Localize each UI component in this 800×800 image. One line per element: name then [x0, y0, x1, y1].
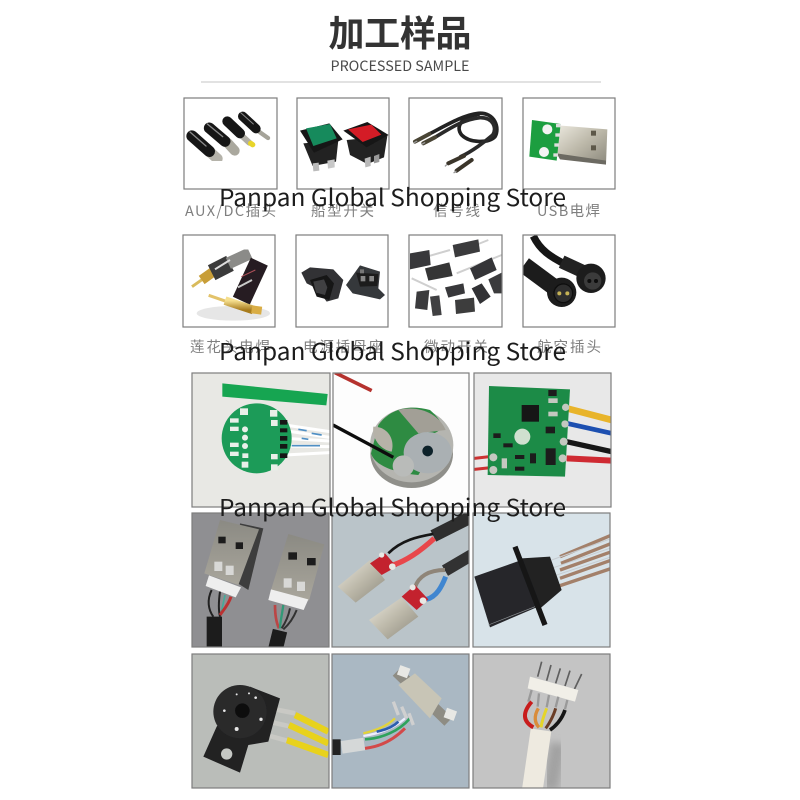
label: 莲花头电焊	[190, 336, 270, 357]
title: 加工样品	[328, 5, 472, 57]
label: 航空插头	[537, 336, 601, 357]
watermark 1: Panpan Global Shopping Store	[219, 179, 566, 213]
photo: white cable with header pins	[473, 654, 610, 790]
panel: micro switches photo	[410, 239, 502, 316]
panel: AUX/DC plugs photo	[186, 112, 270, 161]
panel: signal cable photo	[412, 111, 499, 174]
panel: rocker switches photo	[300, 122, 388, 172]
panel: USB soldering photo	[529, 120, 608, 165]
photo: black sensor with yellow wires	[192, 654, 329, 788]
label: 船型开关	[311, 200, 374, 221]
subtitle: PROCESSED SAMPLE	[330, 56, 470, 76]
photo: soldered buzzer	[334, 374, 454, 488]
label: 信号线	[433, 200, 480, 221]
label: USB电焊	[537, 200, 600, 221]
panel: power socket photo	[301, 265, 385, 302]
watermark 3: Panpan Global Shopping Store	[219, 489, 566, 523]
photo: round PCB with ribbon wires	[192, 373, 330, 507]
label: AUX/DC插头	[185, 200, 276, 221]
photo: black multi-pin connector with wires	[473, 513, 612, 647]
photo: green circuit board with coloured wires	[474, 373, 612, 507]
watermark 2: Panpan Global Shopping Store	[219, 333, 566, 367]
panel: aviation plug photo	[524, 236, 606, 307]
label: 电源插母座	[303, 336, 383, 357]
photo: soldered USB connectors	[192, 513, 329, 648]
photo: soldered USB-C connectors	[332, 513, 472, 647]
panel: RCA plug soldering photo	[191, 250, 270, 320]
photo: D-sub connector with coloured wires	[332, 654, 469, 788]
frames	[183, 98, 615, 788]
label: 微动开关	[424, 336, 488, 357]
